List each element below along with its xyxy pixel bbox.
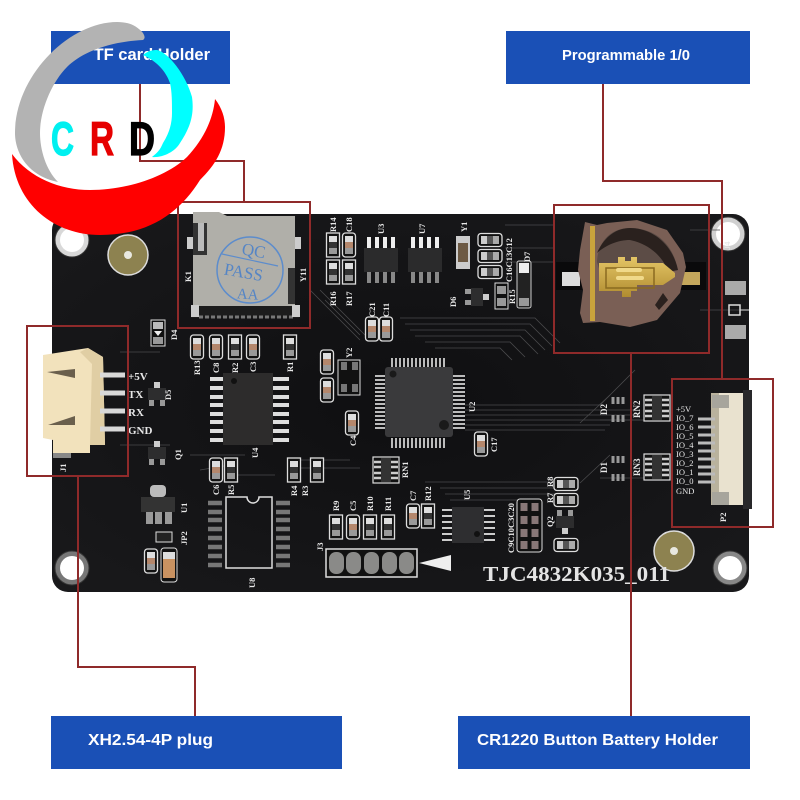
component reference labels: U5 xyxy=(462,490,472,500)
component reference labels: R11 xyxy=(383,497,393,511)
P2 pin labels: +5V xyxy=(676,404,692,414)
label: battery holder xyxy=(458,716,750,769)
P2 pin labels: IO_2 xyxy=(676,458,693,468)
label: TF card holder: TF card Holder xyxy=(94,46,211,64)
component reference labels: U4 xyxy=(250,447,260,458)
component reference labels: C21 xyxy=(367,302,377,317)
callout: TF card holder xyxy=(140,84,310,328)
J1 pin labels: +5V xyxy=(128,371,148,383)
J1 pin labels: GND xyxy=(128,425,152,437)
U2 main processor xyxy=(375,358,465,448)
component reference labels: C7 xyxy=(408,490,418,501)
U8 footprint xyxy=(208,497,290,568)
component reference labels: D7 xyxy=(522,251,532,262)
logo letters xyxy=(51,112,155,165)
component reference labels: C8 xyxy=(211,363,221,373)
component reference labels: Y1 xyxy=(459,222,469,232)
QC PASS AA stamp: QC xyxy=(240,239,267,262)
network labels xyxy=(599,400,642,476)
callout: programmable IO xyxy=(603,84,773,527)
component reference labels: C4 xyxy=(348,435,358,446)
component reference labels: C3 xyxy=(248,362,258,372)
logo letters: C xyxy=(51,112,74,165)
component reference labels: R10 xyxy=(365,496,375,511)
component reference labels: U1 xyxy=(179,503,189,513)
network labels: RN3 xyxy=(632,458,642,476)
component reference labels: Q1 xyxy=(173,449,183,460)
component reference labels: Q2 xyxy=(545,516,555,527)
board traces xyxy=(120,225,740,500)
P2 pin labels: GND xyxy=(676,486,694,496)
component reference labels: R15 xyxy=(507,289,517,304)
component reference labels: C5 xyxy=(348,501,358,511)
label: TF card holder xyxy=(51,31,230,84)
FPC connector xyxy=(698,390,752,509)
J4 pads xyxy=(725,281,749,339)
label: battery holder: CR1220 Button Battery Holder xyxy=(477,732,718,749)
network labels: RN2 xyxy=(632,400,642,418)
P2 pin labels: IO_6 xyxy=(676,422,693,432)
J1 pin labels: RX xyxy=(128,407,144,419)
component reference labels: C9C10C3C20 xyxy=(506,503,516,553)
component reference labels: R4 xyxy=(289,485,299,496)
RN2 and RN3 networks xyxy=(613,395,670,481)
logo letters: D xyxy=(129,112,155,165)
component reference labels: RN1 xyxy=(400,461,410,478)
component reference labels: R17 xyxy=(344,291,354,306)
component reference labels: R14 xyxy=(328,217,338,232)
label: XH2.54 plug xyxy=(51,716,342,769)
component reference labels: C16C13C12 xyxy=(504,238,514,282)
component reference labels: U8 xyxy=(247,578,257,588)
component reference labels: C17 xyxy=(489,437,499,452)
component reference labels: R12 xyxy=(423,486,433,501)
TF card holder component xyxy=(187,212,301,318)
QC PASS AA stamp: PASS xyxy=(223,260,264,285)
P2 pin labels: IO_3 xyxy=(676,449,693,459)
logo letters: R xyxy=(90,112,114,165)
component reference labels: R1 xyxy=(285,362,295,372)
component reference labels: R2 xyxy=(230,363,240,373)
network labels: D1 xyxy=(599,462,609,473)
component reference labels: U3 xyxy=(376,224,386,234)
component reference labels: R13 xyxy=(192,360,202,375)
callout: XH2.54 plug xyxy=(27,326,195,716)
holder reference labels xyxy=(183,268,308,282)
battery holder xyxy=(556,220,706,327)
P2 pin labels: IO_5 xyxy=(676,431,693,441)
J1 pin labels: TX xyxy=(128,389,143,401)
component reference labels: D4 xyxy=(169,329,179,340)
component reference labels: J4 xyxy=(722,241,732,250)
P2 pin labels: IO_0 xyxy=(676,476,693,486)
component reference labels: R7 xyxy=(545,492,555,503)
QC PASS AA stamp xyxy=(217,237,283,304)
centre top components xyxy=(320,233,531,456)
component reference labels: D6 xyxy=(448,297,458,307)
network labels: D2 xyxy=(599,404,609,415)
component reference labels: P2 xyxy=(718,513,728,522)
component reference labels xyxy=(58,217,732,588)
label: programmable IO xyxy=(506,31,750,84)
J1 connector xyxy=(43,348,125,458)
component reference labels: R8 xyxy=(545,477,555,487)
lower-centre components xyxy=(330,457,578,552)
component reference labels: R16 xyxy=(328,291,338,306)
J3 header xyxy=(326,549,417,577)
P2 pin labels: IO_7 xyxy=(676,413,693,423)
component reference labels: JP2 xyxy=(179,531,189,545)
P2 pin labels: IO_4 xyxy=(676,440,694,450)
component reference labels: U7 xyxy=(417,223,427,234)
component reference labels: D5 xyxy=(163,390,173,400)
component reference labels: C11 xyxy=(381,303,391,317)
left-side components xyxy=(141,320,324,582)
holder reference labels: Y11 xyxy=(298,268,308,282)
holder reference labels: K1 xyxy=(183,271,193,282)
logo cyan arc xyxy=(143,50,193,157)
component reference labels: J3 xyxy=(315,542,325,551)
component reference labels: U2 xyxy=(467,402,477,412)
mounting holes xyxy=(55,217,747,585)
P2 pin labels xyxy=(676,404,694,496)
U4 chip xyxy=(210,373,289,445)
component reference labels: Y2 xyxy=(344,348,354,358)
component reference labels: C18 xyxy=(344,217,354,232)
component reference labels: R3 xyxy=(300,486,310,496)
CRD logo xyxy=(12,22,225,235)
label: XH2.54 plug: XH2.54-4P plug xyxy=(88,732,213,749)
QC PASS AA stamp: AA xyxy=(236,286,259,304)
arrow marker xyxy=(419,555,451,571)
logo red arc xyxy=(12,99,225,235)
circuit board xyxy=(43,214,752,592)
J1 pin labels xyxy=(128,371,152,437)
component reference labels: R5 xyxy=(226,485,236,495)
component reference labels: R9 xyxy=(331,501,341,511)
P2 pin labels: IO_1 xyxy=(676,467,693,477)
component reference labels: J1 xyxy=(58,464,68,472)
board model text: TJC4832K035_011 xyxy=(483,562,670,586)
callout lines and highlight boxes xyxy=(27,84,773,716)
component reference labels: C6 xyxy=(211,485,221,495)
callout: battery holder xyxy=(554,205,709,716)
logo grey arc xyxy=(15,22,145,182)
gold mounting pads xyxy=(108,235,694,571)
label: programmable IO: Programmable 1/0 xyxy=(562,48,690,64)
